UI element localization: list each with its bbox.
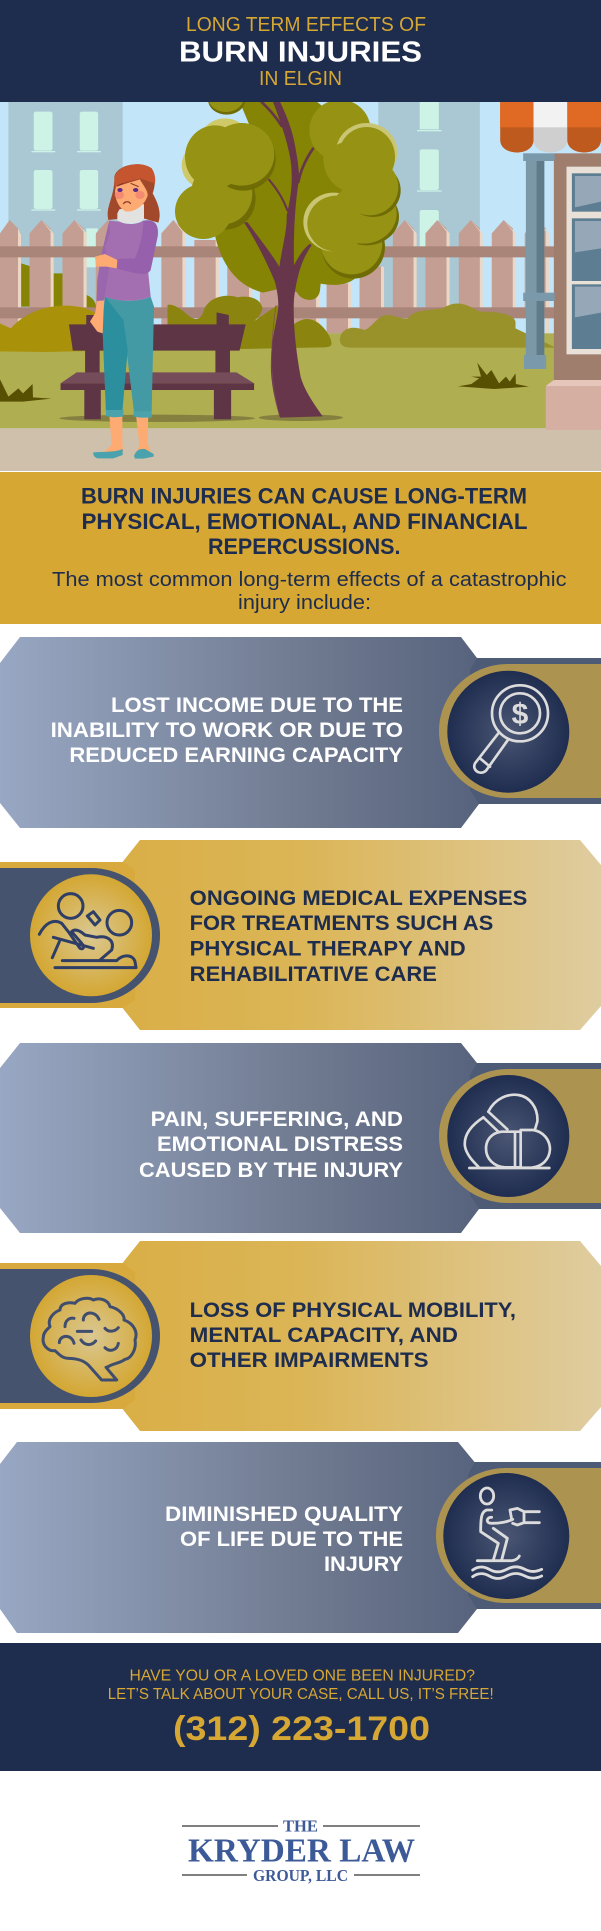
trunk	[244, 100, 323, 418]
bench	[61, 312, 254, 419]
face	[115, 179, 148, 212]
bushes	[0, 296, 556, 352]
tree	[175, 82, 401, 418]
sweater	[97, 221, 155, 301]
title line 1: LONG TERM EFFECTS OF	[186, 14, 426, 36]
panel: medical expenses	[0, 840, 601, 1030]
foliage front left	[175, 123, 276, 239]
title line 2: BURN INJURIES	[179, 36, 422, 68]
icon: pills	[447, 1075, 569, 1197]
text: PHYSICAL THERAPY AND	[190, 938, 466, 960]
text: FOR TREATMENTS SUCH AS	[190, 912, 493, 935]
branches	[260, 100, 313, 210]
woman with neck brace	[90, 164, 160, 459]
call to action text: HAVE YOU OR A LOVED ONE BEEN INJURED?	[130, 1668, 475, 1685]
intro heading: PHYSICAL, EMOTIONAL, AND FINANCIAL	[82, 509, 528, 534]
hair	[108, 164, 160, 223]
text: CAUSED BY THE INJURY	[139, 1159, 403, 1182]
intro text	[52, 569, 566, 614]
forearm hand	[95, 254, 117, 268]
panel: diminished quality of life	[0, 1442, 601, 1633]
left hand	[90, 301, 104, 333]
legs	[103, 415, 151, 453]
phone number: (312) 223-1700	[173, 1710, 430, 1748]
text: INABILITY TO WORK OR DUE TO	[51, 719, 403, 742]
call to action text: LET’S TALK ABOUT YOUR CASE, CALL US, IT’S FREE!	[108, 1686, 494, 1703]
text	[51, 694, 403, 767]
intro heading: REPERCUSSIONS.	[208, 534, 400, 559]
text: MENTAL CAPACITY, AND	[190, 1324, 458, 1347]
logo: The Kryder Law Group	[182, 1817, 420, 1885]
building windows	[31, 102, 442, 267]
header banner	[0, 0, 601, 102]
background shrubs	[21, 263, 97, 308]
text: INJURY	[324, 1553, 403, 1576]
text	[190, 887, 527, 986]
text: REHABILITATIVE CARE	[190, 963, 437, 986]
intro panel	[0, 472, 601, 624]
icon: water skier	[443, 1473, 569, 1599]
grass tufts	[0, 363, 529, 402]
text	[190, 1299, 516, 1372]
intro heading	[81, 484, 528, 559]
text: LOST INCOME DUE TO THE	[111, 694, 403, 717]
ground shadows	[59, 414, 343, 422]
title line 3: IN ELGIN	[259, 68, 342, 90]
eyes and mouth	[117, 188, 138, 192]
foliage front right	[303, 100, 401, 279]
panel: lost income	[0, 637, 601, 828]
footer call to action	[0, 1643, 601, 1771]
text: REDUCED EARNING CAPACITY	[69, 744, 403, 767]
text: PAIN, SUFFERING, AND	[151, 1108, 403, 1131]
text: OF LIFE DUE TO THE	[180, 1528, 403, 1551]
icon: brain	[30, 1275, 152, 1397]
intro text: The most common long-term effects of a catastrophic	[52, 569, 566, 591]
text: DIMINISHED QUALITY	[165, 1503, 403, 1526]
buildings	[8, 102, 480, 315]
pants	[102, 297, 154, 412]
icon: magnifier with dollar: $	[512, 698, 529, 731]
icon: magnifier with dollar	[447, 671, 569, 793]
hair top	[114, 164, 155, 187]
foliage left	[182, 82, 251, 188]
awning	[500, 102, 534, 152]
logo: The Kryder Law Group: GROUP, LLC	[253, 1866, 348, 1885]
text: OTHER IMPAIRMENTS	[190, 1349, 428, 1372]
logo: The Kryder Law Group: KRYDER LAW	[188, 1833, 415, 1870]
panel: loss of mobility	[0, 1241, 601, 1431]
collar	[117, 204, 144, 224]
storefront	[500, 102, 601, 430]
fence	[0, 220, 556, 333]
logo: The Kryder Law Group: THE	[283, 1817, 318, 1836]
intro text: injury include:	[238, 592, 371, 614]
icon: physical therapy	[30, 874, 152, 996]
intro heading: BURN INJURIES CAN CAUSE LONG-TERM	[81, 484, 527, 508]
call to action text	[108, 1668, 494, 1703]
text	[165, 1503, 403, 1576]
text	[139, 1108, 403, 1182]
ground and pavement	[0, 333, 601, 471]
illustration: park background and bench	[0, 102, 601, 471]
canopy back	[215, 99, 357, 300]
text: ONGOING MEDICAL EXPENSES	[190, 887, 527, 910]
panel: pain and suffering	[0, 1043, 601, 1233]
shoes	[93, 449, 154, 459]
text: EMOTIONAL DISTRESS	[157, 1133, 403, 1156]
text: LOSS OF PHYSICAL MOBILITY,	[190, 1299, 516, 1322]
